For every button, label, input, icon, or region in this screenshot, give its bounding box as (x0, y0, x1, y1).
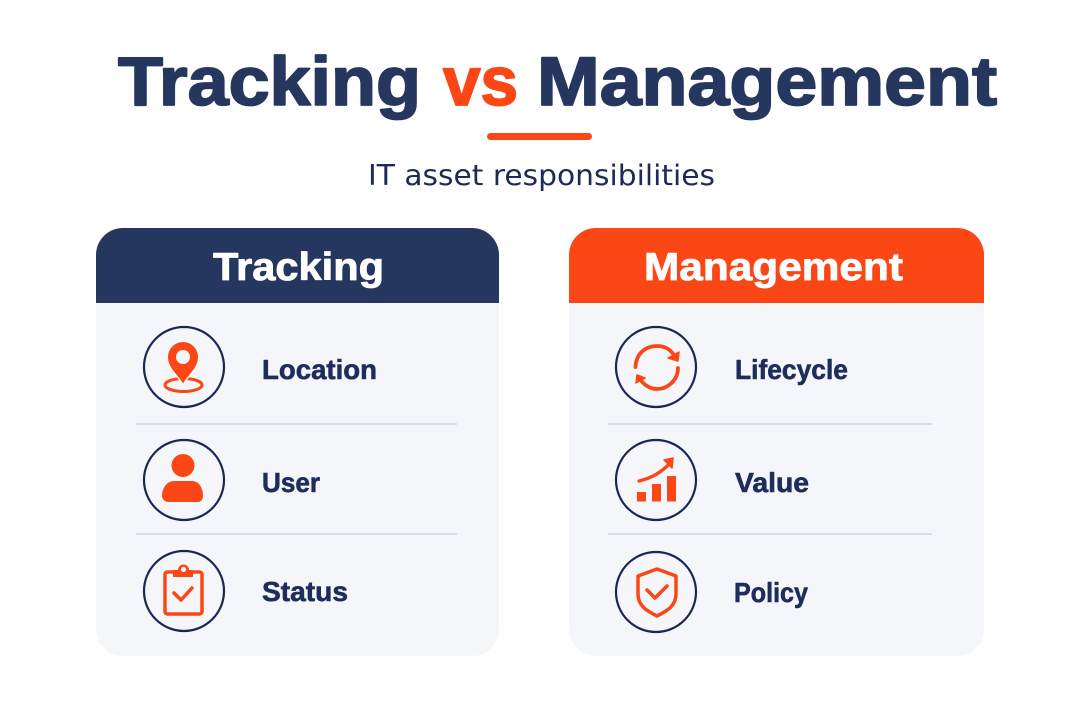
label: policy: Policy (734, 577, 808, 608)
label: lifecycle: Lifecycle (735, 354, 848, 385)
subtitle: IT asset responsibilities (368, 159, 715, 192)
icon: value growth chart (616, 440, 696, 520)
panel: tracking (96, 228, 499, 656)
panel header: management (569, 228, 984, 303)
panel body: management (569, 228, 984, 656)
icon: clipboard status (144, 551, 224, 631)
panel body: tracking (96, 228, 499, 656)
title: Management (537, 43, 997, 120)
label: location: Location (262, 354, 377, 385)
title underline (487, 133, 592, 140)
title (118, 43, 997, 120)
icon: policy shield (616, 552, 696, 632)
panel heading: tracking: Tracking (213, 246, 384, 289)
label: status: Status (262, 576, 348, 607)
label: user: User (262, 467, 320, 498)
icon: user (144, 440, 224, 520)
panel: management (569, 228, 984, 656)
panel heading: management: Management (644, 246, 903, 289)
panel header: tracking (96, 228, 499, 303)
title: Tracking (118, 43, 421, 120)
icon: location pin (144, 327, 224, 407)
icon: lifecycle arrows (616, 327, 696, 407)
label: value: Value (735, 467, 809, 498)
title: vs (443, 43, 518, 120)
